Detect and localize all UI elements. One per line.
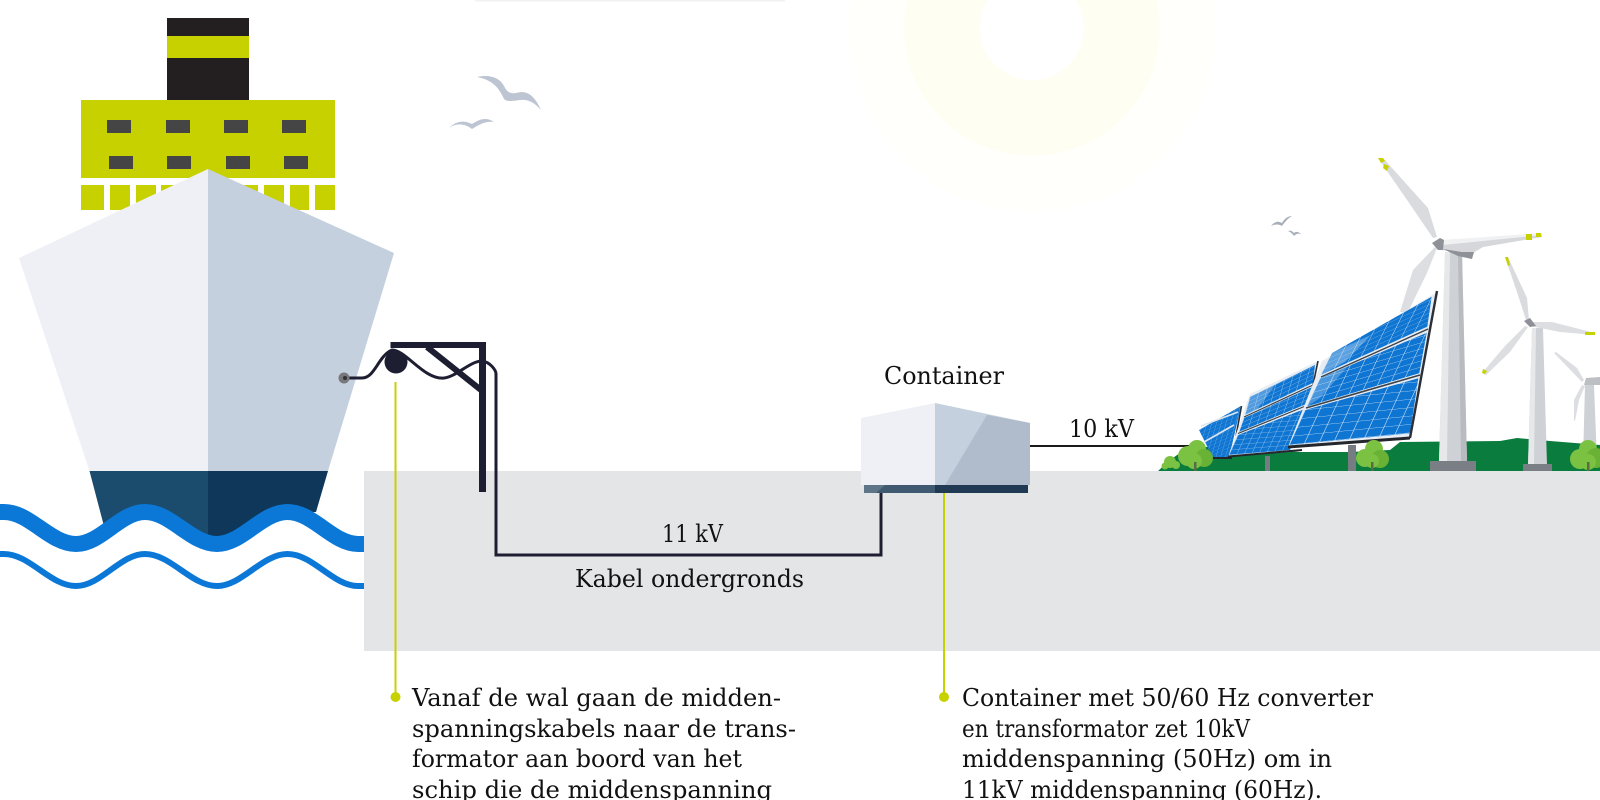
railing blocks [81,185,335,210]
wind turbine 3 [1554,352,1600,461]
text block: container converter: middenspanning (50Hz) om in [962,745,1332,773]
solar panel large [1288,291,1437,471]
sun [848,0,1216,212]
callout line 1 [390,382,400,702]
post [1265,456,1270,471]
text block: shore cables: Vanaf de wal gaan de midden- [411,684,781,712]
label: 10 kV: 10 kV [1069,415,1135,443]
label: cable underground: Kabel ondergronds [575,565,804,593]
upper blade [1378,158,1437,238]
solar panel medium [1228,361,1318,471]
small birds [1271,216,1301,236]
ship [19,18,394,544]
funnel [167,18,249,100]
faint strip at top edge [475,0,785,2]
green hills [1158,438,1600,471]
bush 2 [1356,440,1389,471]
bush 1 [1178,440,1213,471]
callout line 2 [939,493,949,702]
label: container: Container [884,362,1005,390]
ground [364,471,1600,651]
text block: container converter: en transformator zet 10kV [962,715,1251,743]
superstructure deck with windows [81,100,335,178]
tower [1430,252,1476,471]
brace [427,347,481,390]
rear blade [1400,247,1437,312]
post [1348,445,1356,471]
nacelle [1432,238,1474,259]
bush 3 [1570,440,1600,471]
text block: container converter: Container met 50/60 Hz converter [962,684,1374,712]
10 kV line [1030,445,1190,447]
wind turbine 1 [1378,158,1542,471]
ship socket [338,372,350,384]
label: 11 kV: 11 kV [662,520,724,548]
arm [390,342,486,492]
hull [19,169,394,544]
container box [861,403,1030,493]
text block: shore cables: formator aan boord van het [412,745,742,773]
solar panel small [1199,406,1242,459]
right blade [1440,233,1542,253]
text block: shore cables: spanningskabels naar de trans- [412,715,796,743]
birds large [449,76,541,129]
wind turbine 2 [1482,257,1595,471]
water waves [0,512,366,586]
cable [344,350,881,555]
bush small [1162,456,1180,470]
pulley [384,350,408,374]
connection arm with pulley and cable [338,342,881,555]
